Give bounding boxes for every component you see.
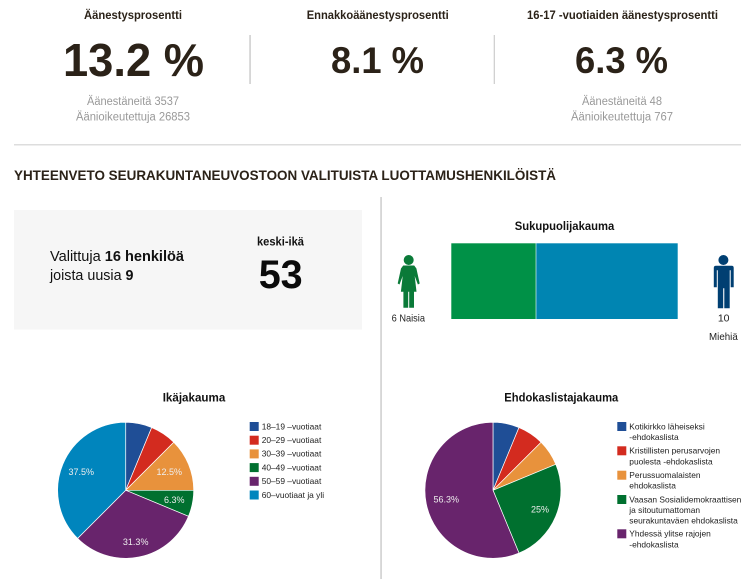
- legend: Vaasan Sosialidemokraattisen: [629, 494, 742, 504]
- legend: 18–19 –vuotiaat: [262, 421, 322, 431]
- bar: men: [536, 243, 678, 319]
- legend: 40–49 –vuotiaat: [262, 462, 322, 472]
- icon: man: [714, 255, 734, 308]
- stat details: Äänioikeutettuja 26853: [76, 112, 190, 124]
- slice labels: 31.3%: [123, 537, 148, 547]
- stat details: Äänioikeutettuja 767: [571, 112, 673, 124]
- stat value: 8.1 %: [331, 40, 424, 81]
- bar: women: [451, 243, 536, 319]
- icon: woman: [398, 255, 420, 308]
- legend: 30–39 –vuotiaat: [262, 449, 322, 459]
- slice labels: [69, 467, 185, 547]
- stat details: Äänestäneitä 3537: [87, 96, 179, 108]
- chart title: Ikäjakauma: [163, 391, 226, 405]
- legend: -ehdokaslista: [629, 540, 679, 550]
- legend: ehdokaslista: [629, 481, 676, 491]
- stat: 16-17 year olds: [527, 10, 718, 124]
- stat: advance voting: [307, 10, 449, 81]
- elected text: Valittuja 16 henkilöä: [50, 248, 185, 265]
- label: men count: Miehiä: [709, 331, 738, 343]
- slice labels: 6.3%: [164, 495, 185, 505]
- section heading: YHTEENVETO SEURAKUNTANEUVOSTOON VALITUISTA LUOTTAMUSHENKILÖISTÄ: [14, 167, 556, 183]
- legend: 20–29 –vuotiaat: [262, 435, 322, 445]
- legend: [617, 421, 742, 550]
- legend: Yhdessä ylitse rajojen: [629, 529, 711, 539]
- label: women count: 6 Naisia: [392, 313, 425, 325]
- slice labels: 12.5%: [157, 467, 182, 477]
- legend: [250, 421, 324, 500]
- stat: overall turnout: [63, 9, 204, 124]
- stat details: Äänestäneitä 48: [582, 96, 662, 108]
- legend: 60–vuotiaat ja yli: [262, 490, 324, 500]
- legend: Perussuomalaisten: [629, 470, 701, 480]
- elected text: joista uusia 9: [49, 267, 134, 284]
- legend: -ehdokaslista: [629, 432, 679, 442]
- stat heading: 16-17 -vuotiaiden äänestysprosentti: [527, 10, 718, 22]
- legend: Kotikirkko läheiseksi: [629, 421, 705, 431]
- stat heading: Äänestysprosentti: [84, 9, 182, 22]
- label: men count: 10: [718, 313, 730, 325]
- stat details: [76, 96, 190, 124]
- stat value: 6.3 %: [575, 40, 668, 81]
- label: men count: [709, 313, 738, 343]
- legend: ja sitoutumattoman: [628, 505, 700, 515]
- legend: seurakuntaväen ehdokaslista: [629, 516, 738, 526]
- panel: elected summary: [14, 210, 362, 330]
- age pie chart: [58, 391, 324, 558]
- stat heading: Ennakkoäänestysprosentti: [307, 10, 449, 22]
- average age label: keski-ikä: [257, 237, 305, 249]
- stat details: [571, 96, 673, 124]
- pie slices: [425, 422, 561, 558]
- legend: Kristillisten perusarvojen: [629, 446, 720, 456]
- stat value: 13.2 %: [63, 34, 204, 86]
- gender chart: [392, 219, 738, 343]
- elected text: [49, 248, 185, 284]
- slice labels: [434, 495, 549, 515]
- chart title: Ehdokaslistajakauma: [504, 391, 619, 405]
- chart title: Sukupuolijakauma: [515, 219, 615, 233]
- candidate list pie chart: [425, 391, 742, 558]
- slice labels: 25%: [531, 505, 549, 515]
- legend: 50–59 –vuotiaat: [262, 476, 322, 486]
- average age value: 53: [259, 253, 303, 297]
- legend: puolesta -ehdokaslista: [629, 456, 713, 466]
- slice labels: 56.3%: [434, 495, 459, 505]
- slice labels: 37.5%: [69, 467, 94, 477]
- pie slices: [58, 422, 194, 558]
